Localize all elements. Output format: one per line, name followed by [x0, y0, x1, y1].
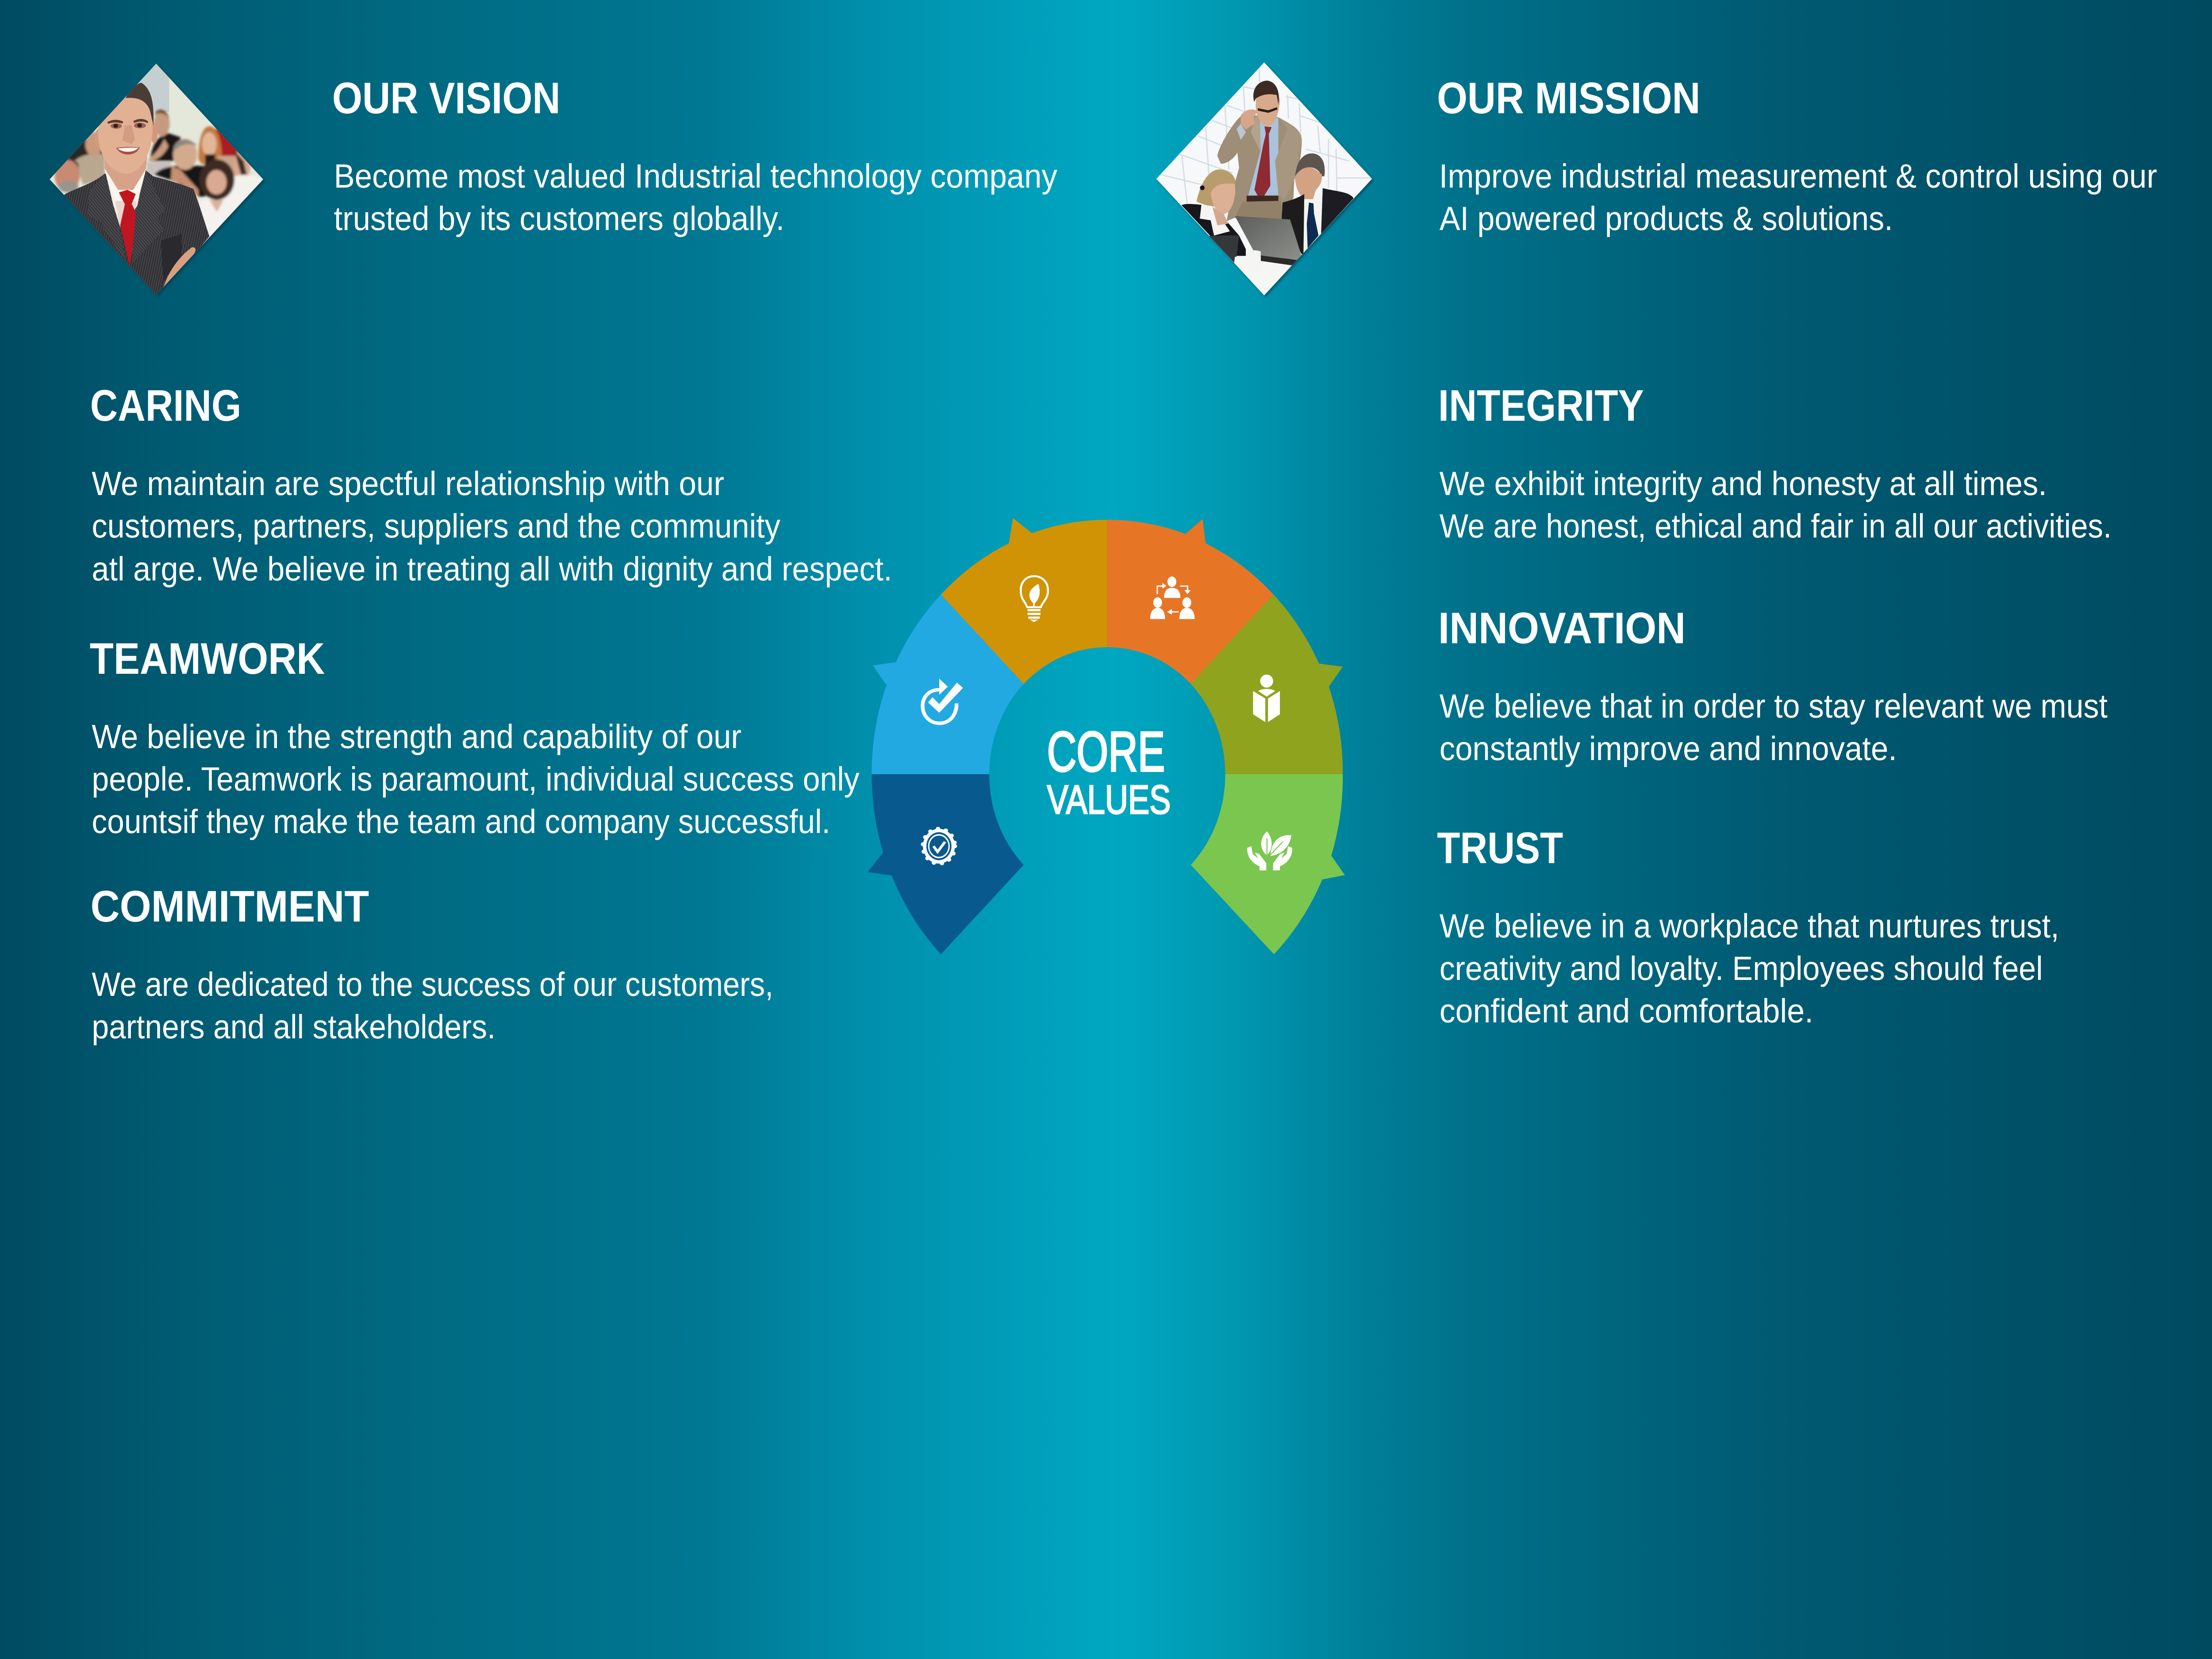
- heading: commitment: COMMITMENT: [91, 882, 369, 931]
- text: innovation description: We believe that in order to stay relevant we must: [1440, 687, 2108, 725]
- text: caring description: [92, 465, 892, 588]
- text: vision statement: [334, 157, 1057, 238]
- text: caring description: customers, partners, suppliers and the community: [92, 507, 780, 545]
- text: innovation description: constantly improve and innovate.: [1440, 730, 1897, 768]
- panel: our mission: [1437, 73, 2157, 238]
- text: caring description: We maintain are spectful relationship with our: [92, 465, 724, 503]
- text: integrity description: We are honest, ethical and fair in all our activities.: [1440, 507, 2112, 545]
- heading: trust: TRUST: [1437, 823, 1563, 873]
- heading: our mission: OUR MISSION: [1437, 73, 1701, 123]
- panel: teamwork: [90, 634, 860, 841]
- panel: trust: [1437, 823, 2059, 1030]
- text: vision statement: Become most valued Industrial technology company: [334, 157, 1057, 195]
- text: mission statement: AI powered products & solutions.: [1440, 200, 1893, 238]
- segment: light blue: [872, 595, 1024, 774]
- text: teamwork description: people. Teamwork is paramount, individual success only: [92, 760, 860, 798]
- photo: businessman with audience: [41, 61, 267, 298]
- heading: teamwork: TEAMWORK: [90, 634, 325, 684]
- text: teamwork description: [92, 718, 860, 841]
- text: commitment description: We are dedicated to the success of our customers,: [92, 966, 773, 1003]
- icon: light bulb with leaf: [1021, 576, 1048, 622]
- icon: person reading book: [1253, 675, 1280, 722]
- segment: dark blue: [868, 774, 1024, 954]
- panel: caring: [90, 381, 892, 588]
- segment: olive: [1191, 595, 1343, 774]
- heading: integrity: INTEGRITY: [1438, 381, 1644, 430]
- heading: our vision: OUR VISION: [332, 73, 561, 123]
- text: trust description: confident and comfortable.: [1440, 992, 1813, 1030]
- heading: innovation: INNOVATION: [1438, 603, 1686, 653]
- text: trust description: We believe in a workplace that nurtures trust,: [1440, 907, 2059, 945]
- text: teamwork description: We believe in the strength and capability of our: [92, 718, 741, 756]
- icon: team cycle: [1150, 576, 1194, 619]
- text: teamwork description: countsif they make the team and company successful.: [92, 803, 830, 841]
- label: core values: CORE: [1047, 720, 1165, 783]
- text: caring description: atl arge. We believe in treating all with dignity and respect.: [92, 550, 892, 588]
- label: core values: VALUES: [1047, 777, 1171, 822]
- segment: green: [1191, 774, 1345, 954]
- text: integrity description: [1440, 465, 2112, 545]
- photo: team around laptop: [1154, 59, 1375, 298]
- panel: commitment: [91, 882, 773, 1046]
- label: core values: [1047, 720, 1171, 822]
- heading: caring: CARING: [90, 381, 241, 430]
- text: commitment description: [92, 966, 773, 1046]
- icon: badge with check: [923, 829, 955, 864]
- icon: circular check: [922, 679, 963, 723]
- chart: core values wheel: [868, 518, 1345, 954]
- text: integrity description: We exhibit integrity and honesty at all times.: [1440, 465, 2047, 503]
- icon: hands holding plant: [1247, 831, 1292, 870]
- text: trust description: [1440, 907, 2059, 1030]
- text: mission statement: Improve industrial measurement & control using our: [1439, 157, 2157, 195]
- segment: gold: [941, 518, 1107, 684]
- text: trust description: creativity and loyalty. Employees should feel: [1440, 950, 2043, 987]
- panel: innovation: [1438, 603, 2108, 768]
- text: commitment description: partners and all stakeholders.: [92, 1008, 495, 1046]
- text: mission statement: [1439, 157, 2157, 238]
- text: innovation description: [1440, 687, 2108, 768]
- panel: integrity: [1438, 381, 2112, 545]
- segment: orange: [1107, 519, 1274, 684]
- panel: our vision: [332, 73, 1057, 238]
- text: vision statement: trusted by its customers globally.: [334, 200, 784, 238]
